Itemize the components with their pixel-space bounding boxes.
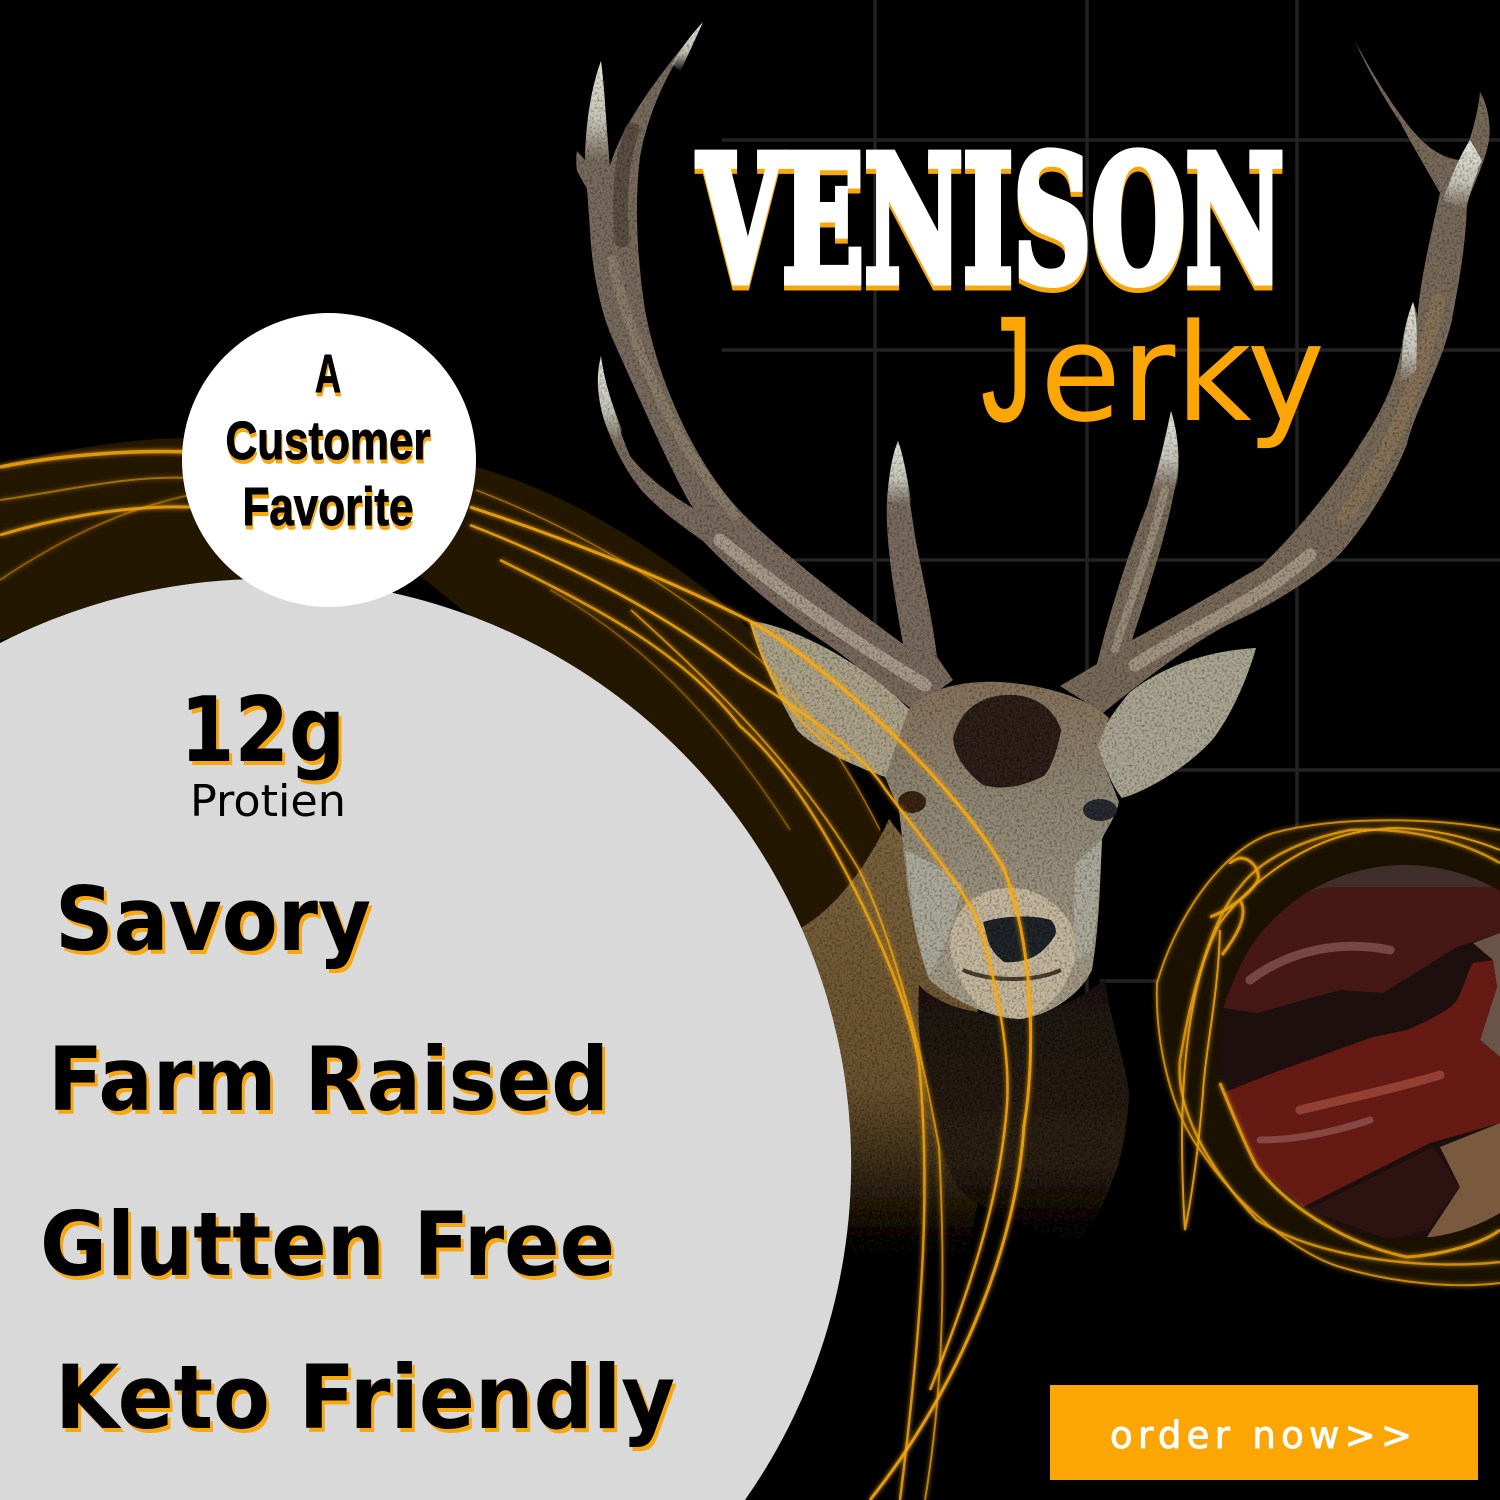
stat: 12g protein [180, 678, 348, 827]
deer illustration [576, 22, 1490, 1265]
grey feature panel [0, 579, 851, 1500]
feature: Keto Friendly: Keto Friendly [58, 1350, 678, 1453]
deer mouth [963, 970, 1061, 979]
right antler pale tips [1153, 140, 1482, 490]
deer neck and body [801, 819, 1000, 1265]
deer muzzle [950, 888, 1075, 1019]
golden swirl around jerky [1157, 820, 1500, 1285]
jerky strip upper [1223, 887, 1500, 1013]
stat: 12g protein: Protien [190, 776, 346, 827]
left antler highlights [612, 130, 925, 685]
order now button [1050, 1385, 1478, 1480]
left antler [576, 22, 953, 710]
deer head [885, 682, 1119, 1019]
golden swirl: dark translucent band [0, 438, 885, 1000]
jerky strip lower [1223, 960, 1500, 1207]
feature: Glutten Free: Glutten Free [40, 1193, 615, 1296]
subtitle: Jerky: erky [1040, 295, 1325, 452]
order now button: order now>> [1110, 1414, 1412, 1457]
feature: Savory: Savory [55, 868, 371, 971]
photo top backdrop [1300, 865, 1499, 897]
left ear [750, 621, 909, 777]
feature: Farm Raised: Farm Raised [48, 1028, 609, 1131]
badge text shadow: A [316, 348, 342, 408]
jerky lower piece [1307, 1147, 1460, 1240]
badge text: Favorite [242, 477, 414, 537]
badge text: A [315, 344, 341, 404]
right ear [1098, 648, 1256, 798]
background grid lines [722, 0, 1500, 1225]
badge text [226, 344, 430, 537]
feature: Glutten Free: Glutten Free [43, 1197, 618, 1300]
feature: Keto Friendly: Keto Friendly [55, 1346, 675, 1449]
deer right cheek [1073, 840, 1102, 960]
jerky photo circle [1218, 860, 1500, 1240]
feature: Savory: Savory [58, 872, 374, 975]
badge text shadow: Favorite [244, 481, 414, 541]
badge text shadow [226, 348, 432, 541]
badge: a customer favorite [182, 313, 476, 607]
stat: 12g protein: 12g [183, 682, 348, 787]
left antler pale tips [585, 22, 912, 505]
deer eyes [898, 791, 1117, 821]
feature: Farm Raised: Farm Raised [51, 1032, 612, 1135]
subtitle: Jerky: J [982, 287, 1032, 452]
deer nose [983, 916, 1056, 962]
wooden surface [1427, 1123, 1500, 1240]
badge text shadow: Customer [226, 415, 432, 475]
jerky highlights [1250, 946, 1440, 1140]
jerky swirl dark band [1157, 820, 1500, 1285]
deer forehead tuft [953, 695, 1061, 788]
deer left cheek [905, 850, 962, 975]
stat: 12g protein: 12g [180, 678, 345, 783]
badge text: Customer [226, 411, 430, 471]
right antler [1060, 41, 1490, 713]
golden swirl strands [0, 452, 1031, 1500]
right backdrop [1473, 933, 1500, 1057]
deer dark mane [918, 979, 1129, 1240]
right antler highlights [1115, 300, 1438, 665]
